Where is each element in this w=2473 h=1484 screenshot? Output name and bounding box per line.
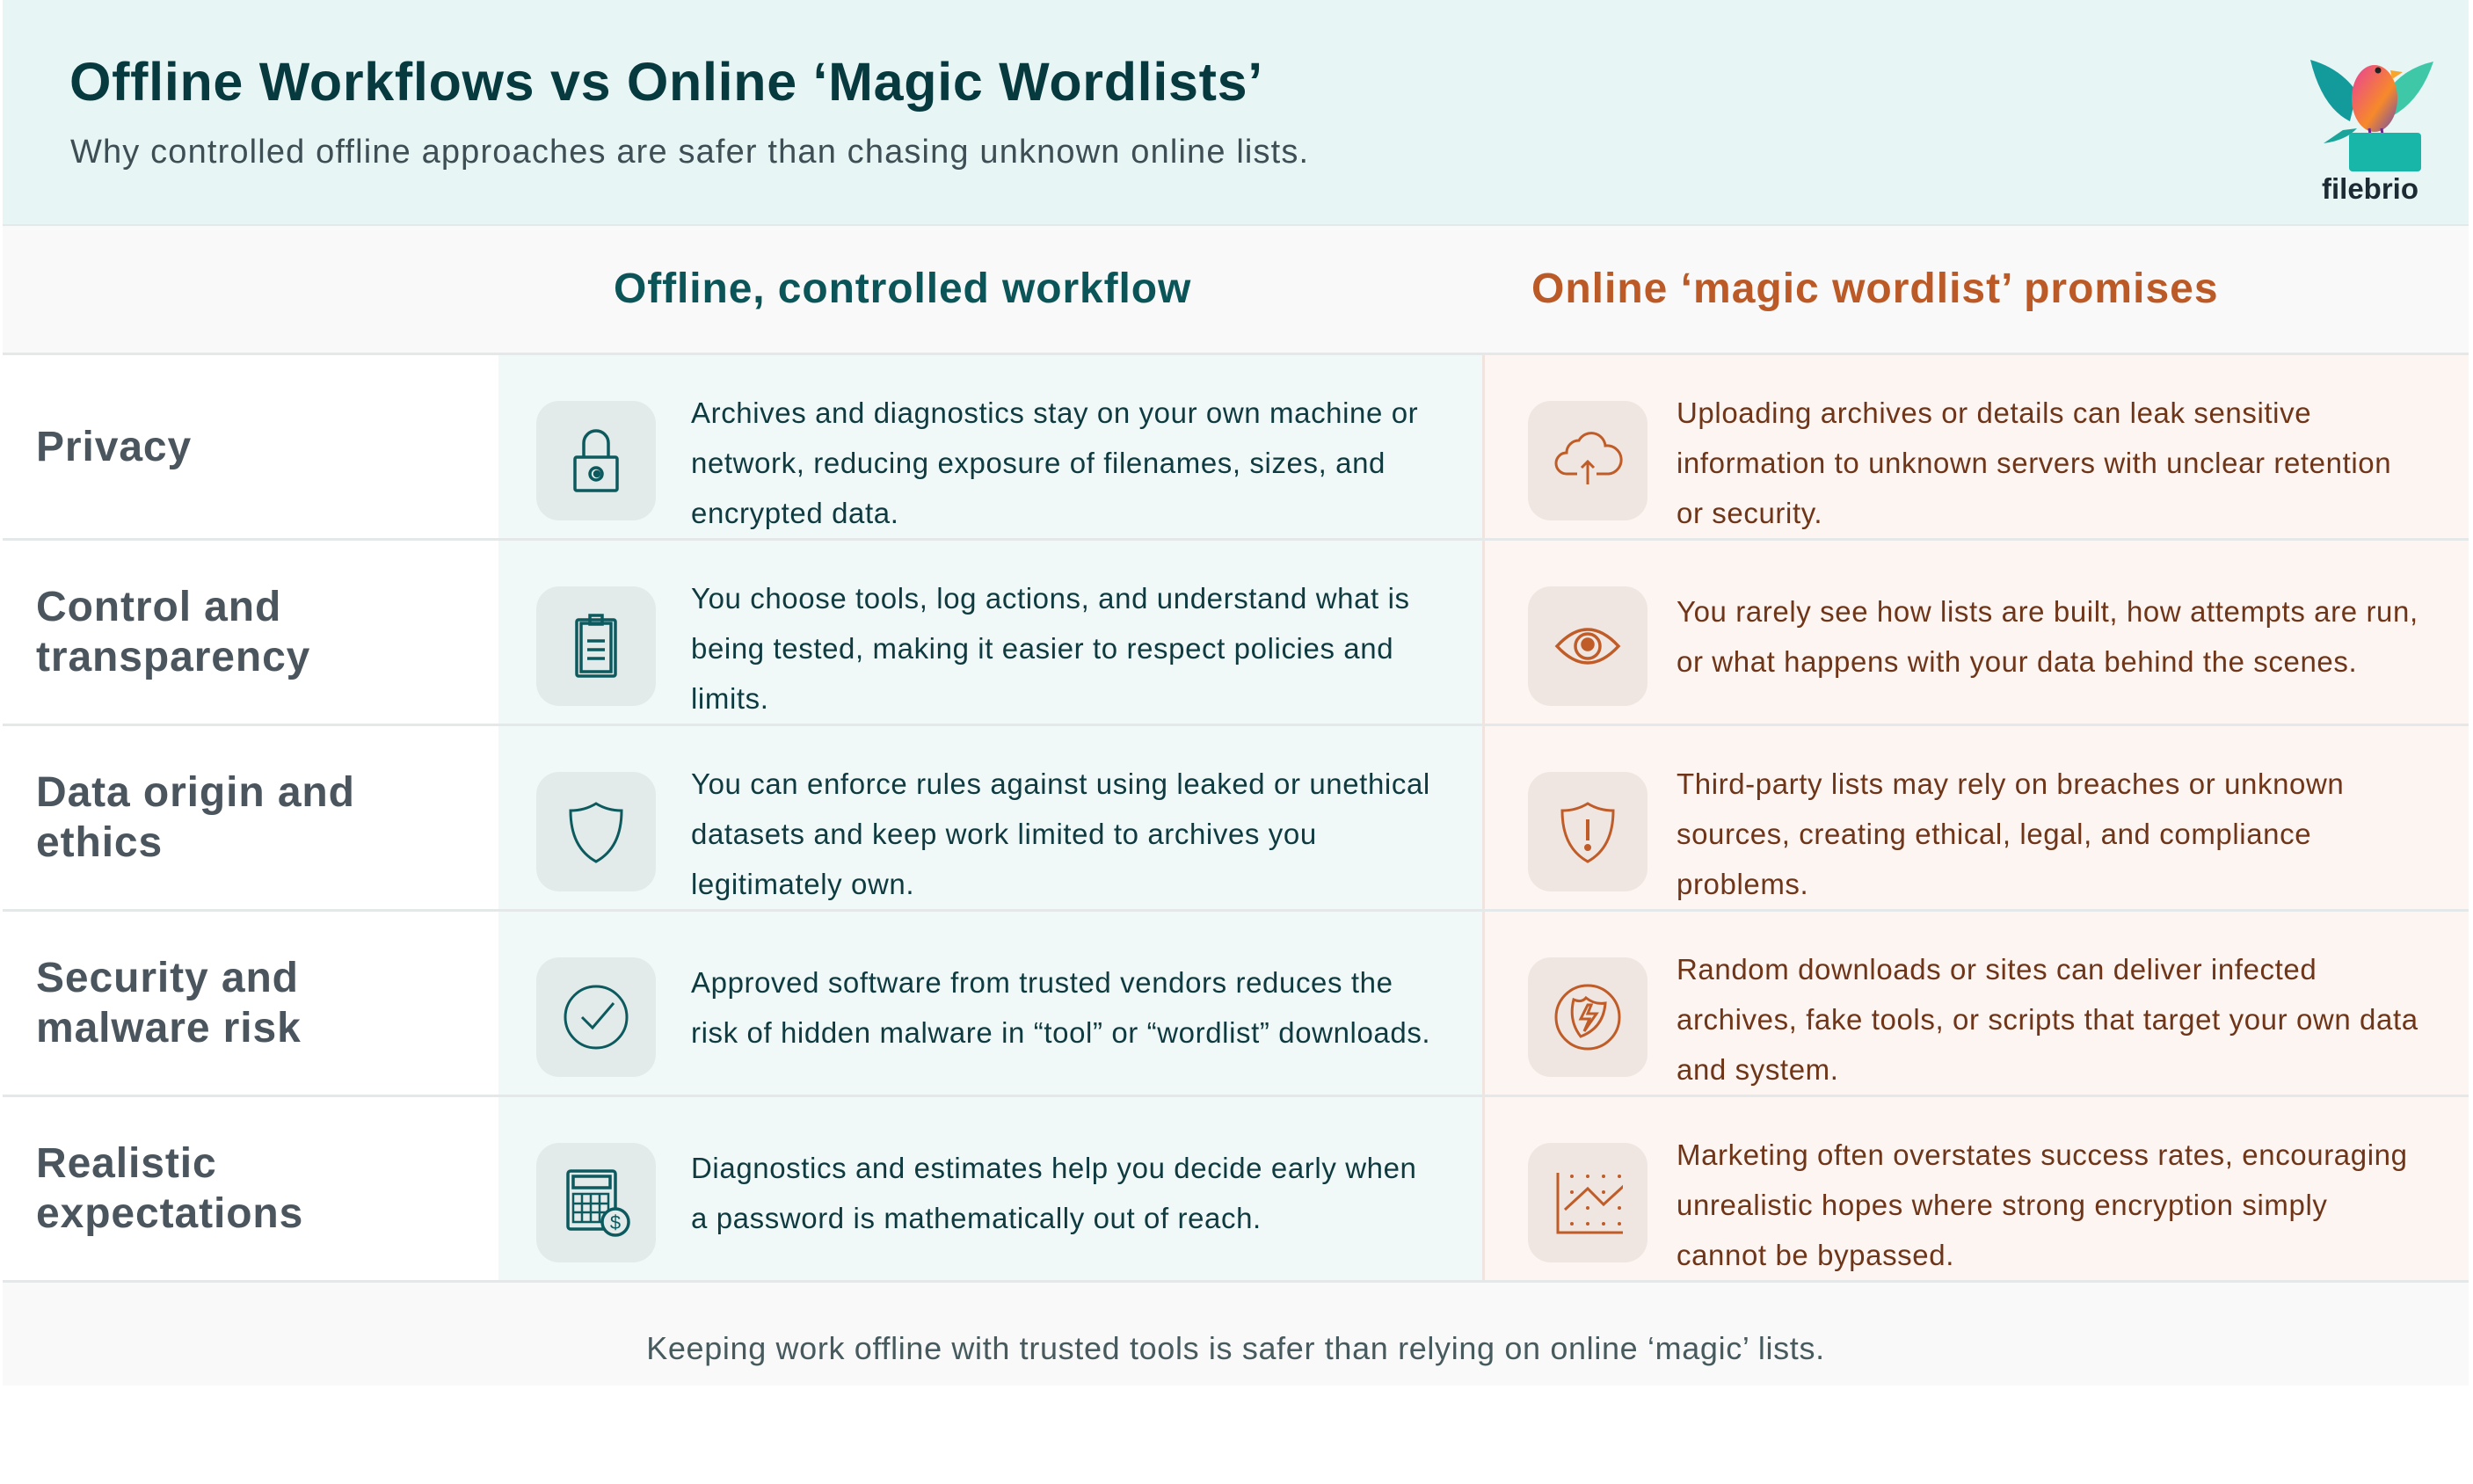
text: a password is mathematically out of reach.: [691, 1202, 1262, 1234]
icon: shield warning: [1528, 772, 1647, 891]
online cell: [1482, 726, 2469, 909]
text: and system.: [1677, 1053, 1839, 1086]
label: [3, 541, 498, 724]
title: Offline Workflows vs Online ‘Magic Wordlists’: [69, 52, 1263, 112]
text: sources, creating ethical, legal, and compliance: [1677, 818, 2311, 850]
text: [1677, 396, 2391, 529]
text: information to unknown servers with unclear retention: [1677, 447, 2391, 479]
label: ethics: [36, 819, 163, 866]
text: or what happens with your data behind the scenes.: [1677, 645, 2357, 678]
text: problems.: [1677, 868, 1808, 900]
text: risk of hidden malware in “tool” or “wordlist” downloads.: [691, 1016, 1430, 1049]
column header band: [3, 224, 2469, 355]
text: unrealistic hopes where strong encryption simply: [1677, 1189, 2327, 1221]
text: cannot be bypassed.: [1677, 1239, 1954, 1271]
icon: cloud upload: [1528, 401, 1647, 520]
icon: shield: [536, 772, 656, 891]
icon: chart: [1528, 1143, 1647, 1262]
footer: Keeping work offline with trusted tools is safer than relying on online ‘magic’ lists.: [646, 1329, 1825, 1366]
text: [1677, 767, 2344, 900]
text: You choose tools, log actions, and understand what is: [691, 582, 1410, 615]
brand name: filebrio: [2322, 172, 2418, 205]
icon: eye: [1528, 586, 1647, 706]
subtitle: Why controlled offline approaches are safer than chasing unknown online lists.: [70, 134, 1309, 171]
text: legitimately own.: [691, 868, 914, 900]
text: Uploading archives or details can leak sensitive: [1677, 396, 2311, 429]
offline cell: [498, 1097, 1482, 1280]
icon: lock: [536, 401, 656, 520]
row: privacy: [36, 355, 2469, 538]
text: datasets and keep work limited to archives you: [691, 818, 1317, 850]
label: Data origin and: [36, 769, 355, 816]
online cell: [1482, 1097, 2469, 1280]
icon: calculator: [536, 1143, 656, 1262]
text: [1677, 953, 2418, 1086]
row: data origin: [36, 726, 2469, 909]
text: You can enforce rules against using leaked or unethical: [691, 767, 1430, 800]
text: limits.: [691, 682, 769, 715]
icon: calculator: $: [610, 1211, 621, 1233]
row: security: [36, 912, 2469, 1095]
label: malware risk: [36, 1005, 302, 1051]
text: being tested, making it easier to respect policies and: [691, 632, 1393, 665]
offline cell: [498, 355, 1482, 538]
text: encrypted data.: [691, 497, 898, 529]
text: You rarely see how lists are built, how attempts are run,: [1677, 595, 2418, 628]
label: [3, 355, 498, 538]
text: Third-party lists may rely on breaches or unknown: [1677, 767, 2344, 800]
text: Marketing often overstates success rates, encouraging: [1677, 1138, 2408, 1171]
online cell: [1482, 912, 2469, 1095]
icon: shield bolt: [1528, 957, 1647, 1077]
label: Security and: [36, 955, 299, 1001]
text: [691, 966, 1430, 1049]
text: [1677, 1138, 2408, 1271]
text: network, reducing exposure of filenames, sizes, and: [691, 447, 1386, 479]
offline cell: [498, 726, 1482, 909]
offline cell: [498, 912, 1482, 1095]
label: [3, 912, 498, 1095]
online cell: [1482, 355, 2469, 538]
text: Approved software from trusted vendors reduces the: [691, 966, 1393, 999]
text: [691, 396, 1418, 529]
offline cell: [498, 541, 1482, 724]
row: control: [36, 541, 2469, 724]
footer: [3, 1283, 2469, 1386]
label: Privacy: [36, 424, 192, 469]
row: expectations: [36, 1097, 2469, 1280]
icon: check circle: [536, 957, 656, 1077]
text: [691, 767, 1430, 900]
text: [691, 1152, 1417, 1234]
label: transparency: [36, 634, 310, 680]
label: Control and: [36, 584, 281, 630]
text: Diagnostics and estimates help you decide early when: [691, 1152, 1417, 1184]
label: Realistic: [36, 1140, 217, 1187]
text: Archives and diagnostics stay on your own machine or: [691, 396, 1418, 429]
online cell: [1482, 541, 2469, 724]
label: expectations: [36, 1190, 303, 1237]
header band: [3, 0, 2469, 224]
icon: clipboard: [536, 586, 656, 706]
header: online: Online ‘magic wordlist’ promises: [1531, 266, 2219, 312]
logo: [2310, 60, 2433, 143]
text: [1677, 595, 2418, 678]
text: or security.: [1677, 497, 1822, 529]
text: Random downloads or sites can deliver infected: [1677, 953, 2317, 986]
header: offline: Offline, controlled workflow: [614, 266, 1191, 312]
doc icon: [2349, 133, 2421, 171]
text: archives, fake tools, or scripts that target your own data: [1677, 1003, 2418, 1036]
text: [691, 582, 1410, 715]
label: [3, 726, 498, 909]
label: [3, 1097, 498, 1280]
